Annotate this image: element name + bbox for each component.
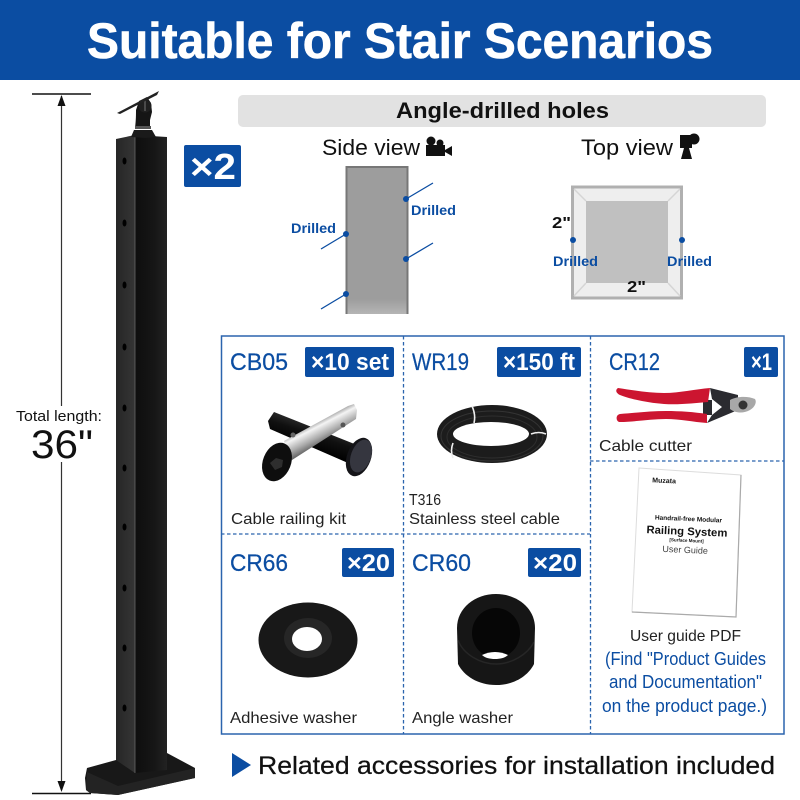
cell: WR19 stainless steel cable [409,347,581,528]
cell: user guide [602,468,767,716]
cell: CR12 cable cutter [599,347,778,455]
user guide note [602,649,767,716]
user guide note: and Documentation" [609,672,762,692]
icon: movie camera [426,136,452,156]
drilled holes [122,158,126,712]
user guide note: (Find "Product Guides [605,649,766,669]
top view diagram [552,187,712,298]
side view heading: Side view [322,135,420,160]
dimension: total length [16,94,102,794]
icon: user guide booklet: Railing System [646,524,728,540]
total length label: Total length: [16,409,102,425]
icon: user guide booklet: Muzata [652,477,676,485]
cell: CR60 angle washer [412,548,581,727]
post quantity badge: ×2 [190,146,236,187]
icon: angled washer [457,594,535,685]
badge: 20: ×20 [347,550,390,577]
footer note: Related accessories for installation included [258,752,775,780]
cell: CR12 cable cutter: CR12 [609,349,660,376]
cell: CB05 cable railing kit: CB05 [230,349,288,376]
icon: cable coil [437,405,547,463]
top view diagram: Drilled [553,253,598,269]
top view diagram: 2" [552,215,571,232]
badge: 20: ×20 [533,550,577,577]
side view diagram: Drilled [291,220,336,236]
post product image [85,91,195,795]
section heading bar: Angle-drilled holes [396,98,609,123]
side view diagram: Drilled [411,202,456,218]
cell: CR66 adhesive washer: Adhesive washer [230,710,358,727]
icon: user guide booklet: [Surface Mount] [669,537,704,544]
cell: CR60 angle washer: CR60 [412,550,471,577]
icon: kit pins [257,404,377,486]
top view panel [552,134,712,298]
icon: flat washer [258,602,358,678]
top view heading: Top view [581,135,673,160]
user guide note: on the product page.) [602,696,767,716]
icon: overhead camera [680,134,700,159]
cell: CB05 cable railing kit [230,347,394,528]
cell: WR19 stainless steel cable: T316 [409,492,441,509]
header banner [0,0,800,80]
badge: 1: ×1 [751,349,772,376]
badge: 150 ft: ×150 ft [503,349,575,376]
icon: user guide booklet: Handrail-free Modular [655,515,723,524]
side view panel [291,135,456,314]
icon: user guide booklet: User Guide [662,544,708,556]
accessories table frame [221,336,784,734]
cell: CR12 cable cutter: Cable cutter [599,438,693,455]
cell: CR66 adhesive washer [230,548,394,727]
cell: WR19 stainless steel cable: WR19 [412,349,469,376]
top view diagram: Drilled [667,253,712,269]
cell: WR19 stainless steel cable: Stainless steel cable [409,511,560,528]
cell: CB05 cable railing kit: Cable railing kit [231,511,347,528]
cell: user guide: User guide PDF [630,628,741,645]
badge: 10 set: ×10 set [311,349,389,376]
icon: red cutter [616,388,756,423]
post faces [116,135,135,773]
base plate [85,753,195,795]
length value: 36" [31,423,93,467]
cell: CR60 angle washer: Angle washer [412,710,514,727]
title: Suitable for Stair Scenarios [87,13,713,69]
section heading bar [238,95,766,127]
top view diagram: 2" [627,279,646,296]
icon: user guide booklet [632,468,741,617]
cell: CR66 adhesive washer: CR66 [230,550,288,577]
side view diagram [291,167,456,314]
icon: arrow [232,753,251,777]
top mount [135,97,152,128]
